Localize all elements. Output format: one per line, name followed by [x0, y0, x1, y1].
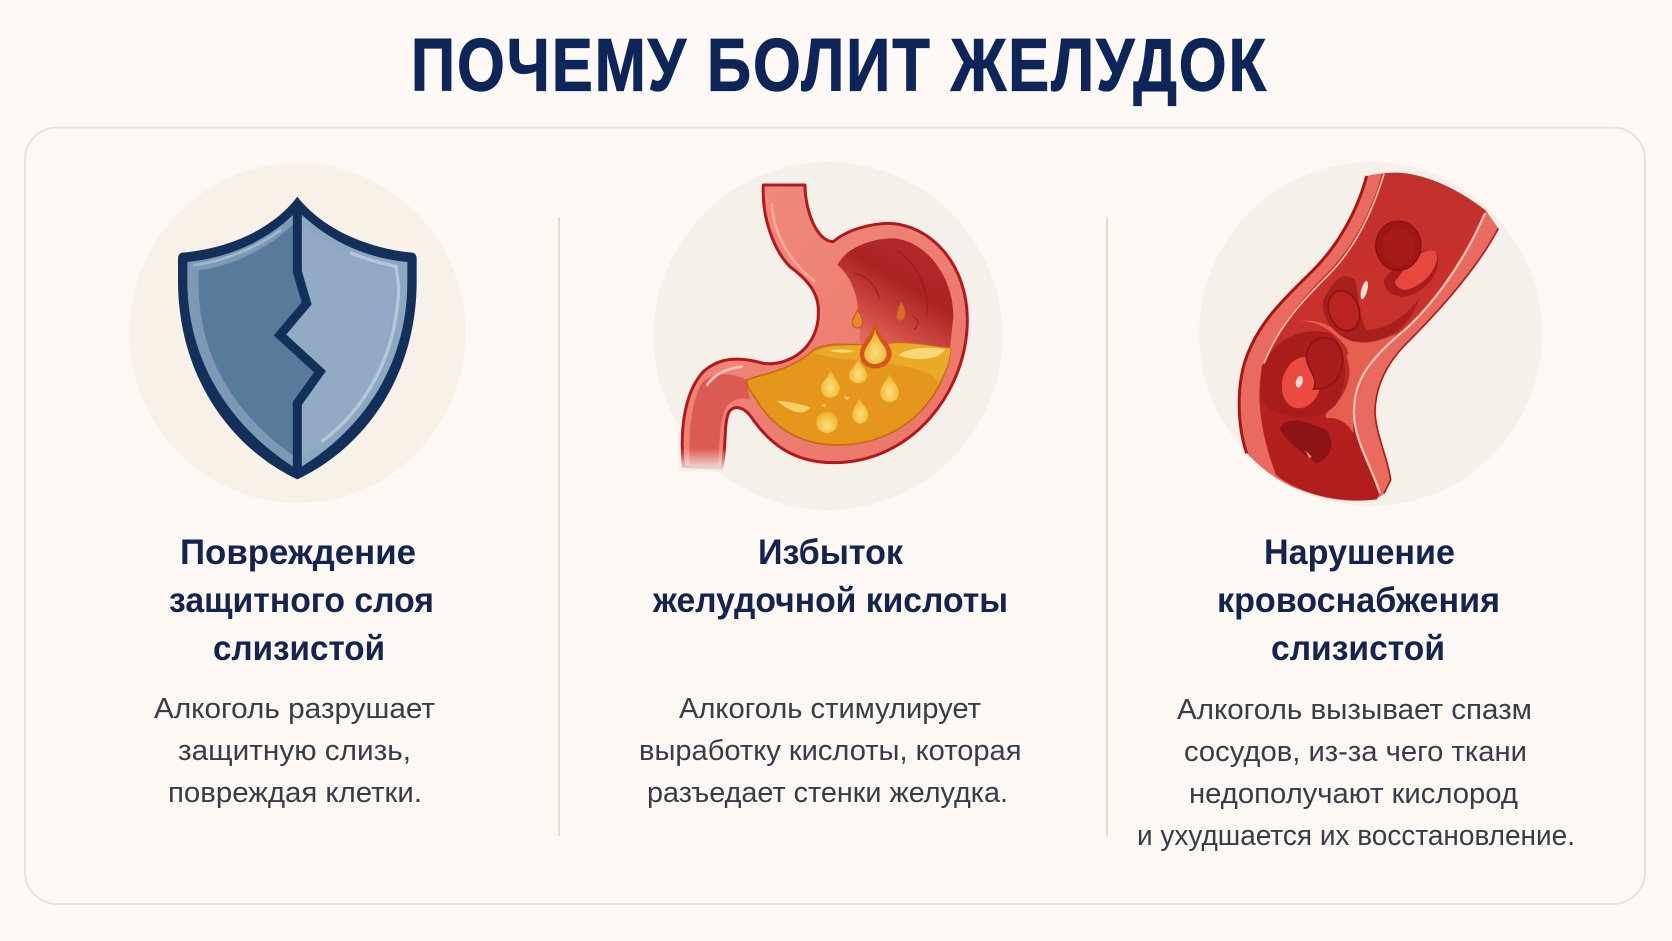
panel: main card — [25, 128, 1645, 904]
text block: повреждая клетки. — [168, 777, 422, 809]
divider left — [558, 217, 560, 836]
text block: разъедает стенки желудка. — [647, 777, 1008, 809]
heading: слизистой — [213, 629, 385, 668]
text block: защитную слизь, — [178, 735, 411, 767]
text block — [154, 693, 435, 809]
text block — [1137, 694, 1575, 852]
heading: кровоснабжения — [1217, 581, 1500, 620]
icon: circle backdrop — [130, 163, 466, 503]
text block: Алкоголь вызывает спазм — [1177, 694, 1532, 726]
icon: circle backdrop — [654, 162, 1002, 510]
text block: выработку кислоты, которая — [639, 735, 1022, 767]
text block: недополучают кислород — [1189, 778, 1518, 810]
heading: Повреждение — [180, 533, 416, 572]
text block: Алкоголь разрушает — [154, 693, 435, 725]
icon: circle backdrop — [1199, 162, 1542, 506]
divider right — [1106, 217, 1108, 836]
heading: Нарушение — [1264, 533, 1455, 572]
text block — [639, 693, 1022, 809]
text block: сосудов, из-за чего ткани — [1184, 736, 1527, 768]
heading — [169, 533, 434, 668]
heading — [652, 533, 1008, 620]
heading: Избыток — [758, 533, 903, 572]
heading — [1217, 533, 1500, 668]
heading: желудочной кислоты — [652, 581, 1008, 620]
icon: blood vessel with cells — [1239, 173, 1498, 501]
text block: Алкоголь стимулирует — [679, 693, 981, 725]
heading: слизистой — [1271, 629, 1445, 668]
panel: impaired blood supply — [1137, 162, 1575, 852]
panel: excess stomach acid — [639, 162, 1022, 809]
title: ПОЧЕМУ БОЛИТ ЖЕЛУДОК — [411, 24, 1268, 106]
text block: и ухудшается их восстановление. — [1137, 820, 1575, 852]
icon: stomach with acid — [678, 185, 967, 472]
icon: cracked shield — [178, 197, 417, 479]
heading: защитного слоя — [169, 581, 434, 620]
panel: mucous layer damage — [130, 163, 466, 809]
